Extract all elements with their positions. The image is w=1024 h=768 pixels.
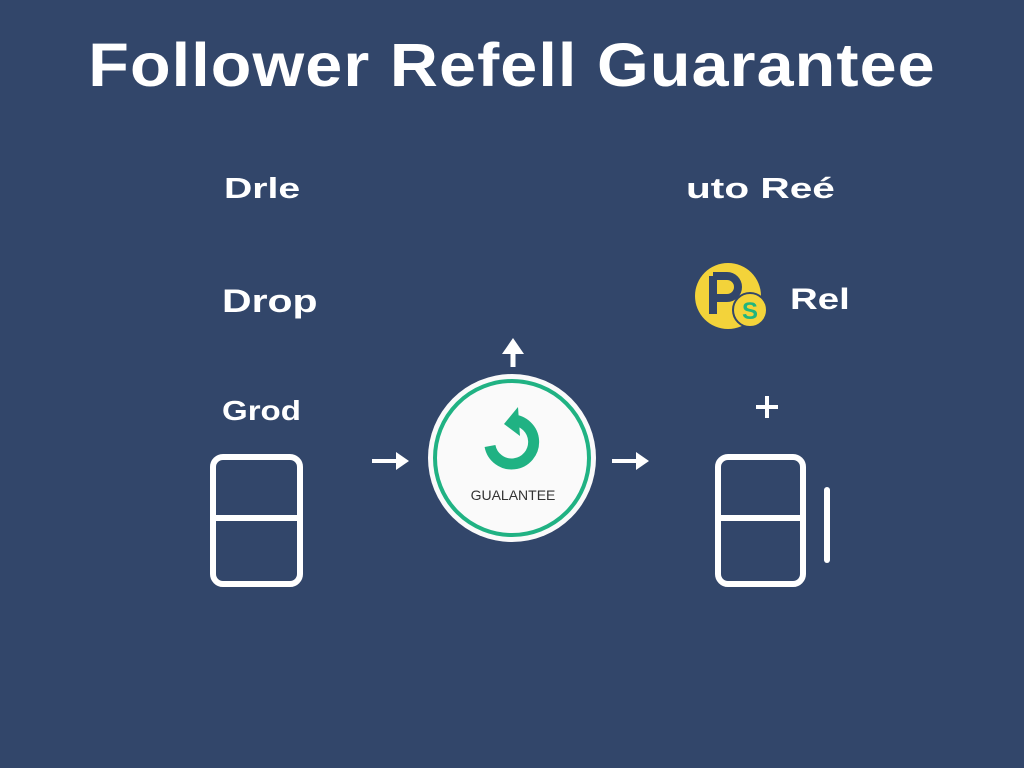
badge text: GUALANTEE [471, 487, 555, 503]
title: Follower Refell Guarantee [88, 31, 936, 99]
guarantee badge [428, 374, 596, 542]
icon: left container [213, 457, 300, 584]
arrow: left to circle [372, 452, 409, 470]
icon: coin logo: S [742, 298, 758, 325]
icon: coin logo [695, 263, 767, 329]
label: Grod: Grod [222, 395, 301, 426]
label: uto Reé: uto Reé [686, 173, 835, 205]
label: Drle: Drle [224, 173, 300, 205]
label: Rel: Rel [790, 283, 850, 316]
icon: refresh arrow [490, 407, 534, 464]
icon: right container [718, 457, 827, 584]
icon: plus [756, 396, 778, 418]
arrow: up [502, 338, 524, 367]
label: Drop: Drop [222, 283, 318, 319]
arrow: circle to right [612, 452, 649, 470]
